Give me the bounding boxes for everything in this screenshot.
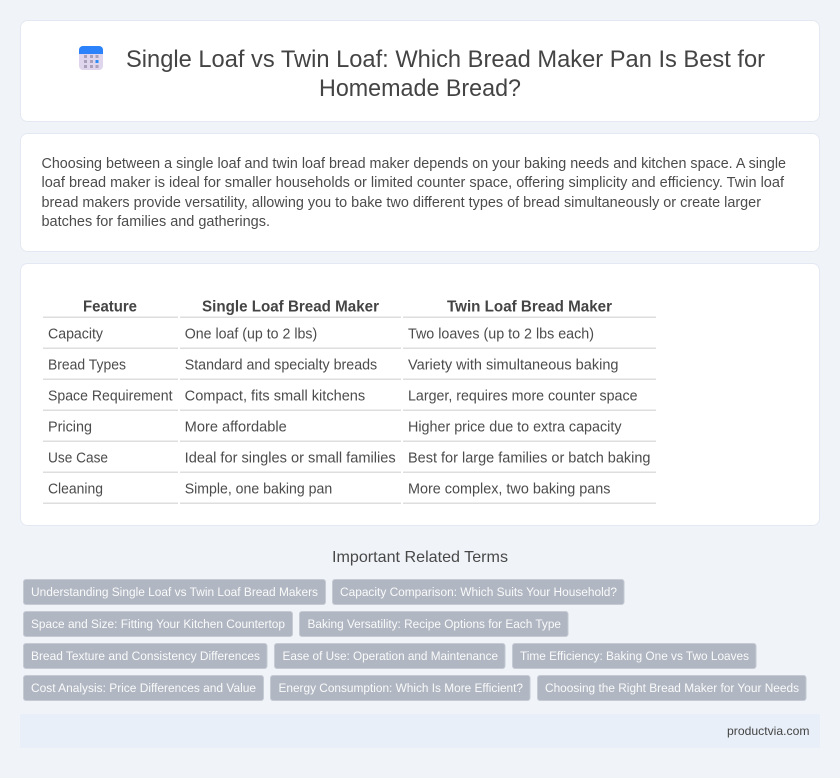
tag: Understanding Single Loaf vs Twin Loaf Bread Makers xyxy=(31,585,318,599)
tag: Bread Texture and Consistency Differences xyxy=(31,649,260,663)
tag: Baking Versatility: Recipe Options for Each Type xyxy=(308,617,561,631)
table row: cleaning: Simple, one baking pan xyxy=(185,482,332,498)
title xyxy=(126,46,765,102)
footer source text: productvia.com xyxy=(727,724,810,738)
table row: cleaning xyxy=(48,482,610,498)
table row: capacity: Capacity xyxy=(48,326,104,342)
table header row: Single Loaf Bread Maker xyxy=(202,298,379,316)
table row: pricing: Higher price due to extra capacity xyxy=(408,420,622,436)
table row: use case: Ideal for singles or small families xyxy=(185,450,396,466)
text block: introduction paragraph: Choosing between a single loaf and twin loaf bread maker depends on your baking needs and kitchen space. A single xyxy=(42,156,786,172)
table row: cleaning: More complex, two baking pans xyxy=(408,482,610,498)
table row: capacity: Two loaves (up to 2 lbs each) xyxy=(408,326,594,342)
tag: Choosing the Right Bread Maker for Your Needs xyxy=(545,681,799,695)
title: Single Loaf vs Twin Loaf: Which Bread Maker Pan Is Best for xyxy=(126,46,765,73)
tag xyxy=(24,676,264,700)
panel: title header xyxy=(20,20,820,122)
tag: Space and Size: Fitting Your Kitchen Countertop xyxy=(31,617,285,631)
tag xyxy=(538,676,806,700)
table row: cleaning: Cleaning xyxy=(48,482,103,498)
table row: space requirement: Larger, requires more counter space xyxy=(408,388,638,404)
icon: calendar xyxy=(79,46,103,70)
table row: space requirement: Space Requirement xyxy=(48,388,172,404)
table row: space requirement xyxy=(48,388,638,404)
tag: Capacity Comparison: Which Suits Your Household? xyxy=(340,585,617,599)
table row: pricing: More affordable xyxy=(185,420,287,436)
table header row xyxy=(83,298,612,316)
table row: bread types: Variety with simultaneous baking xyxy=(408,358,618,374)
tag xyxy=(24,644,267,668)
text block: introduction paragraph: bread makers provide versatility, allowing you to bake two different types of bread simultaneously or create larger xyxy=(42,195,761,211)
text block: introduction paragraph: loaf bread maker is ideal for smaller households or limited counter space, offering simplicity and efficiency. Twin loaf xyxy=(42,175,785,191)
table header row: Feature xyxy=(83,298,137,316)
table header row: Twin Loaf Bread Maker xyxy=(447,298,612,316)
tag xyxy=(274,644,505,668)
table row: bread types: Standard and specialty breads xyxy=(185,358,377,374)
panel: introduction xyxy=(20,134,820,252)
tag: Time Efficiency: Baking One vs Two Loaves xyxy=(520,649,749,663)
tag xyxy=(24,612,292,636)
table row: use case: Use Case xyxy=(48,450,108,466)
title: Homemade Bread? xyxy=(319,75,521,102)
tag: Cost Analysis: Price Differences and Value xyxy=(31,681,256,695)
footer xyxy=(20,714,820,748)
table row: pricing: Pricing xyxy=(48,420,92,436)
heading: important related terms: Important Related Terms xyxy=(332,549,508,566)
tag xyxy=(512,644,756,668)
table row: use case xyxy=(48,450,650,466)
table row: use case: Best for large families or batch baking xyxy=(408,450,650,466)
table row: capacity: One loaf (up to 2 lbs) xyxy=(185,326,317,342)
table row: pricing xyxy=(48,420,622,436)
panel: related term tags xyxy=(24,580,806,700)
tag xyxy=(332,580,624,604)
tag xyxy=(270,676,530,700)
table row: space requirement: Compact, fits small kitchens xyxy=(185,388,365,404)
tag: Ease of Use: Operation and Maintenance xyxy=(282,649,498,663)
table row: capacity xyxy=(48,326,594,342)
table row: bread types xyxy=(48,358,618,374)
text block: introduction paragraph: batches for families and gatherings. xyxy=(42,214,270,230)
tag: Energy Consumption: Which Is More Efficient? xyxy=(278,681,523,695)
tag xyxy=(300,612,568,636)
text block: introduction paragraph xyxy=(42,156,786,230)
table row: bread types: Bread Types xyxy=(48,358,126,374)
tag xyxy=(24,580,326,604)
panel: comparison table xyxy=(20,264,820,526)
